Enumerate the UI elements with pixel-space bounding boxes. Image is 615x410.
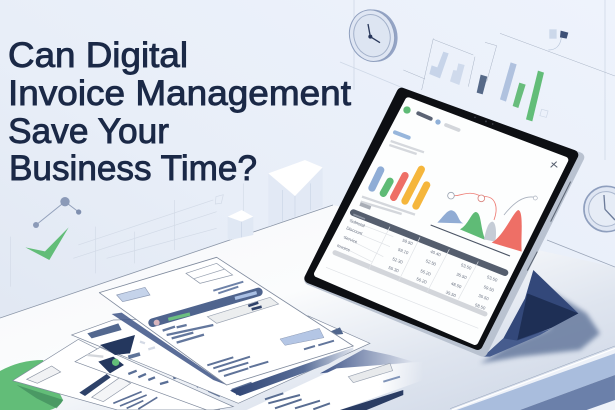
- data table: 35.50: [478, 293, 490, 302]
- green circle accent: [0, 360, 63, 410]
- data table: 52.30: [392, 256, 404, 265]
- tablet screen: [317, 101, 565, 342]
- data table: 40.40: [430, 249, 442, 258]
- title: [8, 35, 351, 188]
- data table: Discount: [346, 225, 364, 236]
- invoice sheet: top: [99, 257, 353, 385]
- data table: 53.50: [486, 274, 499, 283]
- tablet camera: [474, 116, 493, 125]
- data table: 53.50: [460, 262, 473, 271]
- screen header: [389, 106, 557, 167]
- faint wall grid: [11, 183, 243, 287]
- screen area chart: [431, 192, 537, 256]
- data table: 59.10: [397, 247, 410, 256]
- desk surface: [0, 205, 615, 410]
- data table: 35.50: [456, 272, 468, 280]
- icon: wall clock right: [584, 186, 615, 232]
- chart caption lines: [360, 197, 415, 215]
- 3D bar blocks: [228, 160, 323, 240]
- title: Business Time?: [9, 148, 257, 188]
- tablet: [309, 93, 579, 352]
- desk front edge: [450, 346, 615, 410]
- tablet stand: [483, 270, 578, 357]
- data table: [326, 213, 505, 328]
- screen bar chart: [372, 169, 427, 206]
- tablet shadow: [480, 290, 600, 363]
- data table: 58.50: [474, 302, 487, 311]
- icon: network nodes: [33, 197, 81, 228]
- wall lines: [340, 0, 605, 160]
- tablet side buttons: [527, 182, 571, 271]
- invoice sheet: lower left: [75, 347, 233, 410]
- title: Save Your: [8, 111, 169, 151]
- icon: wall clock top: [344, 4, 403, 67]
- data table: 59.50: [402, 238, 414, 246]
- data table: 48.50: [450, 281, 463, 290]
- data table: 55.20: [420, 268, 432, 277]
- invoice sheet: far left: [13, 339, 220, 410]
- data table: Service: [343, 235, 359, 245]
- data table: 35.50: [445, 290, 457, 298]
- data table: Invoice: [336, 243, 351, 253]
- invoice sheet: bottom right: [247, 349, 423, 410]
- data table: 59.50: [483, 284, 495, 293]
- title: Invoice Management: [8, 73, 351, 113]
- data table: 56.20: [416, 276, 428, 285]
- tablet body: [309, 93, 579, 352]
- data table: 52.50: [425, 258, 437, 267]
- invoice sheet: middle: [72, 316, 370, 403]
- wall bar chart: [403, 29, 615, 121]
- data table: Subtotal: [349, 218, 366, 228]
- invoice papers: [13, 257, 423, 410]
- title: Can Digital: [8, 35, 188, 75]
- data table: 55.30: [388, 265, 400, 274]
- icon: green check mark: [25, 227, 69, 260]
